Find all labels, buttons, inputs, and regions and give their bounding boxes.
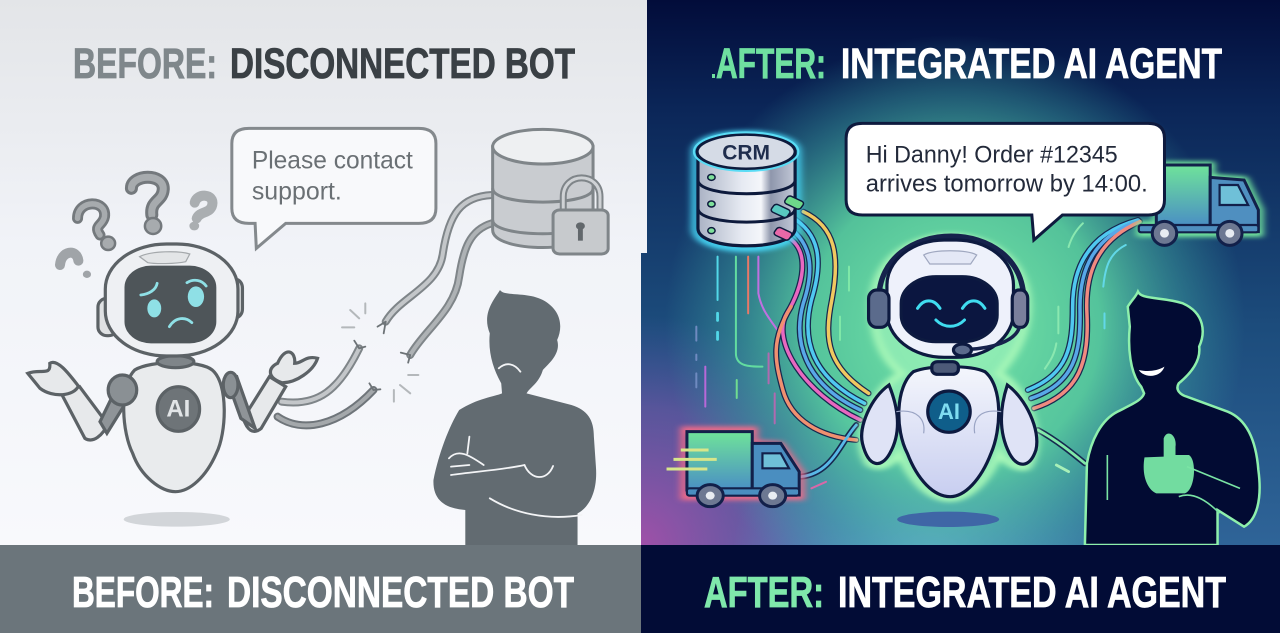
after heading (712, 40, 1222, 88)
panel: before (0, 0, 647, 633)
after caption band (641, 545, 1280, 633)
sparks (342, 303, 418, 402)
person: thumbs up silhouette (1085, 292, 1260, 545)
panel: after (641, 0, 1280, 633)
person: arms crossed silhouette (433, 290, 596, 545)
robot head (98, 244, 242, 356)
CRM label: CRM (722, 141, 770, 164)
after heading: AFTER: (716, 40, 826, 88)
robot body (862, 362, 1037, 497)
before heading: DISCONNECTED BOT (230, 40, 575, 88)
before caption band: DISCONNECTED BOT (227, 568, 574, 617)
speech bubble: please contact support: Please contact (252, 146, 413, 174)
speech bubble: order update: arrives tomorrow by 14:00. (866, 171, 1148, 198)
AI badge (157, 387, 200, 431)
speech bubble: please contact support (232, 128, 436, 248)
database with padlock (493, 129, 608, 254)
AI badge: AI (166, 396, 190, 423)
truck: top right (1139, 165, 1260, 245)
robot shadow (124, 512, 230, 527)
robot: confused (28, 244, 318, 527)
data lines below CRM (696, 223, 1126, 488)
AI badge: AI (938, 399, 960, 424)
robot shadow (897, 512, 999, 527)
AI badge (928, 391, 970, 432)
speech bubble: order update (846, 123, 1164, 240)
CRM database (694, 132, 805, 248)
after caption band: AFTER: (704, 568, 824, 617)
before caption band (0, 545, 641, 633)
robot: happy with headset (862, 236, 1037, 527)
before heading: BEFORE: (73, 40, 217, 88)
speech bubble: order update: Hi Danny! Order #12345 (866, 142, 1118, 169)
robot body (28, 352, 318, 492)
colourful cables (776, 212, 1140, 477)
before caption band: BEFORE: (72, 568, 214, 617)
icon: question marks (60, 177, 212, 278)
robot head (869, 236, 1028, 357)
icon: thumb up (1144, 433, 1194, 493)
truck: bottom left (667, 430, 801, 507)
broken cables (278, 195, 492, 425)
speech bubble: please contact support: support. (252, 177, 342, 205)
robot glow (862, 237, 1035, 498)
before heading (73, 40, 575, 88)
